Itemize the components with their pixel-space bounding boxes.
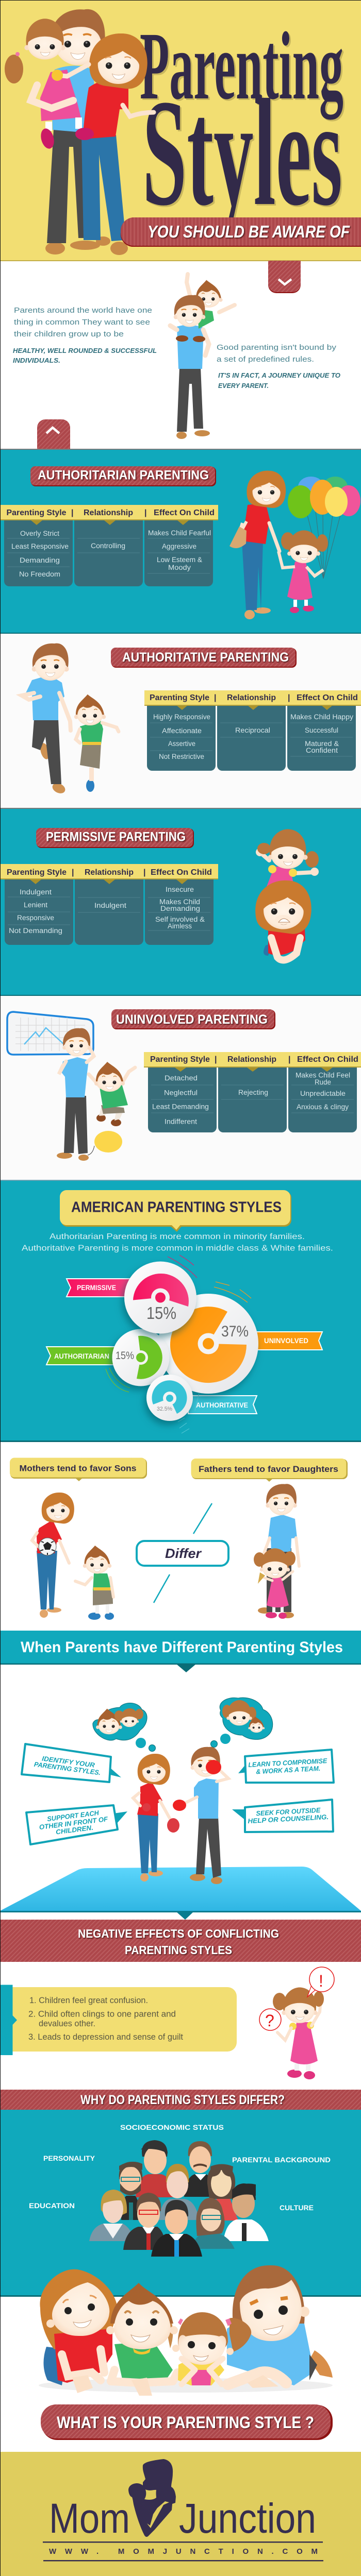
labels: reasons [29, 2123, 331, 2212]
tip: seek outside help: HELP OR COUNSELING. [248, 1813, 329, 1825]
table: uninvolved: Unpredictable [300, 1090, 346, 1097]
callout: fathers favor daughters [191, 1459, 348, 1482]
table: uninvolved: | [215, 1055, 217, 1064]
text: parents around the world: HEALTHY, WELL ROUNDED & SUCCESSFUL [13, 347, 157, 354]
labels: reasons: SOCIOECONOMIC STATUS [120, 2123, 224, 2131]
ribbon: permissive: PERMISSIVE [77, 1283, 116, 1292]
table: authoritarian: Effect On Child [154, 509, 215, 517]
banner: when parents have different parenting styles [0, 1631, 361, 1672]
ribbon: authoritarian [46, 1347, 118, 1365]
illustration: father with daughter [254, 1484, 299, 1619]
list: negative effects [0, 1985, 237, 2055]
table: uninvolved: Least Demanding [152, 1103, 209, 1111]
table: authoritative: Matured & [305, 740, 339, 748]
panel: uninvolved parenting [7, 1009, 361, 1161]
table: uninvolved: Anxious & clingy [297, 1103, 349, 1111]
heading: permissive: PERMISSIVE PARENTING [46, 829, 186, 844]
panel: header [0, 0, 361, 261]
heading: authoritarian [30, 466, 216, 486]
tip: seek outside help [232, 1800, 333, 1832]
list: negative effects: devalues other. [39, 2019, 95, 2028]
callout: mothers favor sons [10, 1458, 147, 1481]
tip: learn to compromise: & WORK AS A TEAM. [256, 1765, 321, 1775]
table: authoritative: Not Restrictive [159, 753, 204, 760]
table: permissive: Aimless [168, 922, 192, 930]
text: parents around the world: INDIVIDUALS. [13, 357, 60, 364]
table: authoritative: | [288, 693, 290, 702]
illustration: father with child on shoulders [170, 274, 235, 439]
tip: support each other: OTHER IN FRONT OF [39, 1815, 109, 1831]
callout: american parenting styles: AMERICAN PARENTING STYLES [71, 1199, 282, 1216]
pie: authoritative 32.5% [146, 1375, 193, 1421]
banner: negative effects heading: NEGATIVE EFFECTS OF CONFLICTING [78, 1927, 279, 1940]
ribbon: You should be aware of [121, 217, 361, 247]
table: authoritative: Reciprocal [235, 726, 270, 734]
table: uninvolved: Indifferent [165, 1118, 197, 1125]
table: permissive: Relationship [85, 868, 134, 877]
table: permissive: Indulgent [20, 888, 52, 896]
table: uninvolved: | [288, 1055, 290, 1064]
text: good parenting [217, 343, 340, 389]
table: authoritative: Effect On Child [297, 693, 358, 702]
table: authoritarian: Controlling [91, 542, 125, 550]
panel: american parenting styles [0, 1180, 361, 1442]
ribbon: uninvolved [255, 1332, 322, 1350]
illustration: angry mother and girl with balloons [229, 471, 360, 619]
banner: negative effects heading [0, 1920, 361, 1962]
illustration: mother with ball and son [32, 1493, 114, 1620]
ribbon: authoritative [188, 1396, 257, 1414]
banner: why do parenting styles differ: WHY DO PARENTING STYLES DIFFER? [80, 2093, 285, 2107]
illustration: chart board with father, boy and balloon [7, 1012, 135, 1161]
thought bubble: left [93, 1703, 156, 1752]
ribbon: authoritarian: AUTHORITARIAN [54, 1352, 109, 1360]
table: authoritarian: Overly Strict [20, 530, 59, 537]
table: authoritarian: | [71, 509, 73, 517]
table: authoritarian: Moody [168, 564, 191, 571]
table: uninvolved: Effect On Child [297, 1055, 358, 1064]
pie: uninvolved 37% [158, 1294, 258, 1394]
footer: MomJunction logo: Junction [179, 2495, 316, 2542]
illustration: parents with boxing gloves [133, 1747, 228, 1884]
panel: when parents have different styles [0, 1631, 361, 1920]
table: permissive: | [72, 868, 74, 877]
table: uninvolved: Parenting Style [150, 1055, 210, 1064]
panel: introduction [13, 261, 340, 449]
chart: parenting style percentages [46, 1255, 322, 1433]
table: permissive: Self involved & [155, 916, 205, 923]
table: authoritative: Highly Responsive [153, 713, 210, 721]
table: uninvolved: Relationship [227, 1055, 276, 1064]
button: what is your parenting style [41, 2404, 333, 2440]
table: uninvolved: Makes Child Feel [296, 1072, 350, 1079]
tab: down chevron [268, 261, 301, 293]
illustration: confused girl: ? [265, 2011, 274, 2030]
table: permissive: Lenient [24, 901, 47, 909]
tip: identify your parenting styles: IDENTIFY YOUR [42, 1754, 95, 1769]
heading: authoritarian: AUTHORITARIAN PARENTING [38, 468, 209, 482]
table: authoritative: Successful [305, 726, 338, 734]
pie: uninvolved 37%: 37% [221, 1323, 249, 1340]
title: Parenting Styles [140, 12, 343, 238]
table: authoritarian: Relationship [84, 509, 133, 517]
table: permissive: Insecure [166, 886, 194, 893]
ribbon: uninvolved: UNINVOLVED [264, 1336, 308, 1345]
table: authoritative [144, 690, 361, 771]
illustration: family lying down [39, 2265, 333, 2396]
table: authoritarian: | [144, 509, 146, 517]
table: authoritarian: Least Responsive [11, 543, 69, 550]
footer: MomJunction logo: Mom [49, 2495, 130, 2542]
table: uninvolved: Neglectful [164, 1089, 198, 1096]
tip: support each other: SUPPORT EACH [46, 1809, 100, 1823]
table: uninvolved [144, 1052, 361, 1132]
callout: fathers favor daughters: Fathers tend to favor Daughters [199, 1465, 338, 1474]
panel: authoritarian parenting [0, 449, 361, 634]
table: permissive: Effect On Child [151, 868, 212, 877]
panel: mothers and fathers differ [10, 1458, 348, 1620]
panel: why do parenting styles differ [0, 2090, 361, 2297]
illustration: tantrum girl on sad mother [255, 829, 319, 960]
table: permissive: | [143, 868, 145, 877]
table: authoritarian: Demanding [20, 556, 60, 564]
table: permissive [0, 864, 218, 945]
table: permissive: Makes Child [159, 898, 200, 906]
pie: permissive 15%: 15% [146, 1303, 176, 1323]
icon: mother and child silhouette [128, 2459, 176, 2537]
banner: negative effects heading: PARENTING STYLES [125, 1943, 232, 1957]
tip: identify your parenting styles [22, 1744, 121, 1782]
table: permissive: Responsive [17, 914, 54, 922]
tip: learn to compromise [238, 1750, 334, 1783]
heading: uninvolved [111, 1009, 275, 1029]
tip: support each other [26, 1805, 127, 1844]
illustration: confused girl [259, 1967, 334, 2079]
table: authoritative: Parenting Style [150, 693, 209, 702]
table: uninvolved: Detached [165, 1074, 198, 1082]
pie: authoritative 32.5%: 32.5% [157, 1406, 172, 1412]
text: good parenting: a set of predefined rules. [217, 355, 314, 364]
illustration: family of three [5, 9, 154, 255]
illustration: confused girl: ! [319, 1972, 323, 1990]
label: differ: Differ [165, 1546, 202, 1561]
tip: learn to compromise: LEARN TO COMPROMISE [248, 1757, 327, 1769]
heading: permissive [36, 828, 194, 848]
labels: reasons: PARENTAL BACKGROUND [232, 2156, 331, 2164]
text: good parenting: EVERY PARENT. [218, 382, 269, 389]
list: negative effects: 3. Leads to depression and sense of guilt [28, 2032, 183, 2042]
table: uninvolved: Rejecting [238, 1089, 268, 1096]
list: negative effects: 1. Children feel great confusion. [29, 1995, 148, 2005]
table: uninvolved: Rude [315, 1078, 331, 1086]
heading: authoritative [111, 648, 297, 668]
table: authoritarian: Makes Child Fearful [148, 529, 211, 537]
tab: up chevron [37, 419, 70, 449]
table: permissive: Parenting Style [7, 868, 67, 877]
text: parents around the world: their children grow up to be [14, 330, 124, 338]
text: minority and white families: Authoritarian Parenting is more common in minority families. [50, 1232, 305, 1241]
banner: when parents have different parenting styles: When Parents have Different Parenting Styles [21, 1639, 343, 1656]
table: authoritarian: Aggressive [162, 543, 196, 550]
table: authoritarian: No Freedom [19, 570, 60, 578]
table: authoritative: Affectionate [162, 727, 202, 735]
labels: reasons: PERSONALITY [43, 2154, 95, 2162]
footer: MomJunction logo [0, 2452, 361, 2576]
heading: authoritative: AUTHORITATIVE PARENTING [122, 650, 289, 665]
illustration: group of flat people [89, 2140, 269, 2257]
table: authoritarian: Low Esteem & [157, 556, 202, 564]
labels: reasons: CULTURE [280, 2204, 314, 2212]
callout: american parenting styles [60, 1190, 291, 1232]
heading: uninvolved: UNINVOLVED PARENTING [116, 1012, 268, 1027]
text: minority and white families: Authoritative Parenting is more common in middle class & White families. [22, 1244, 333, 1253]
table: authoritarian: Parenting Style [6, 509, 67, 517]
table: permissive: Demanding [160, 905, 200, 912]
pie: authoritarian 15% [112, 1329, 169, 1386]
panel: negative effects [0, 1920, 361, 2079]
table: authoritative: Relationship [227, 693, 276, 702]
pie: permissive 15% [124, 1261, 196, 1333]
text: good parenting: Good parenting isn't bound by [217, 343, 337, 352]
tip: support each other: CHILDREN. [55, 1824, 94, 1836]
panel: authoritative parenting [22, 643, 361, 795]
table: authoritative: Makes Child Happy [290, 713, 353, 721]
blue floor [0, 1867, 361, 1920]
table: authoritative: | [214, 693, 216, 702]
footer: MomJunction logo: WWW. MOMJUNCTION.COM [49, 2547, 318, 2556]
callout: mothers favor sons: Mothers tend to favor Sons [20, 1464, 136, 1473]
panel: permissive parenting [0, 808, 361, 996]
tip: identify your parenting styles: PARENTING STYLES. [34, 1760, 101, 1776]
illustration: father and son running [22, 643, 119, 795]
table: authoritative: Assertive [168, 740, 195, 748]
pie: authoritarian 15%: 15% [116, 1350, 134, 1362]
ribbon: authoritative: AUTHORITATIVE [196, 1401, 248, 1409]
table: authoritative: Confident [306, 747, 338, 754]
label: differ [137, 1503, 228, 1603]
button: what is your parenting style: WHAT IS YOUR PARENTING STYLE ? [57, 2413, 314, 2432]
list: negative effects: 2. Child often clings to one parent and [28, 2009, 176, 2019]
text: parents around the world [13, 306, 157, 364]
banner: why do parenting styles differ [0, 2090, 361, 2110]
text: parents around the world: Parents around the world have one [14, 306, 152, 315]
labels: reasons: EDUCATION [29, 2201, 75, 2210]
text: parents around the world: thing in common They want to see [14, 318, 150, 327]
table: permissive: Indulgent [94, 902, 126, 909]
text: good parenting: IT'S IN FACT, A JOURNEY UNIQUE TO [218, 372, 340, 379]
text: minority and white families [22, 1232, 333, 1253]
thought bubble: right [210, 1698, 273, 1748]
table: authoritarian [0, 505, 218, 586]
tip: seek outside help: SEEK FOR OUTSIDE [256, 1806, 321, 1817]
table: permissive: Not Demanding [9, 927, 62, 935]
ribbon: permissive [67, 1279, 132, 1297]
